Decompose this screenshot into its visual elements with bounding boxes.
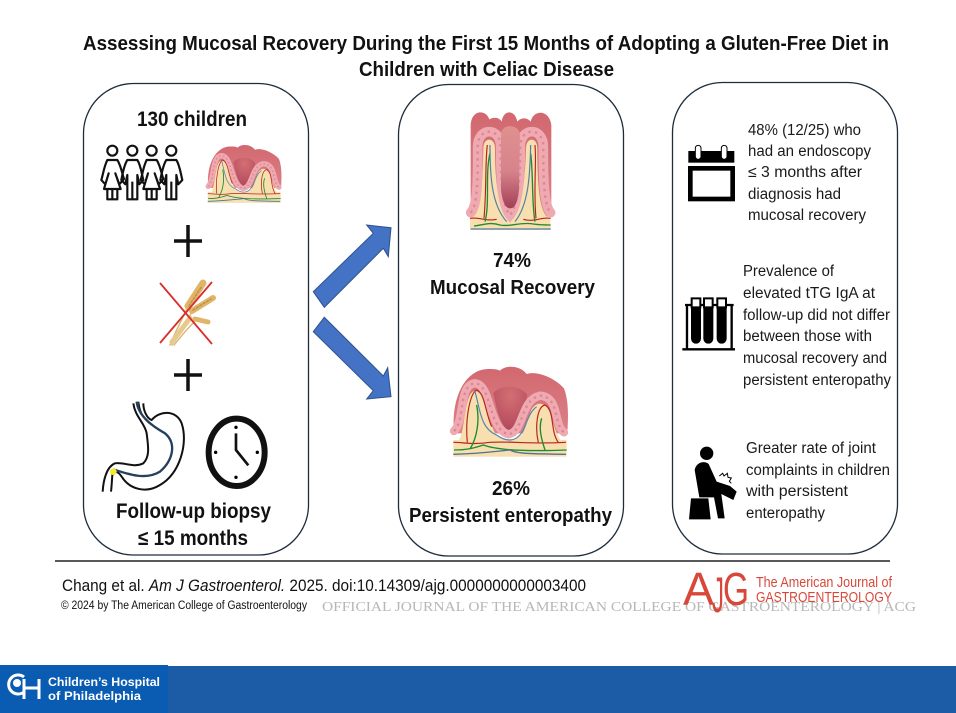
title: Children with Celiac Disease xyxy=(359,59,614,81)
plus sign xyxy=(174,359,202,391)
icon: crossed wheat xyxy=(160,282,213,345)
panel: additional findings xyxy=(672,82,898,554)
icon: test tubes xyxy=(682,298,735,349)
text: joint complaints finding: with persistent xyxy=(745,483,849,500)
plus sign xyxy=(174,225,202,257)
stat: 74% mucosal recovery xyxy=(430,250,596,299)
citation: Chang et al. Am J Gastroenterol. 2025. doi:10.14309/ajg.0000000000003400 xyxy=(62,576,586,595)
logo: AJG xyxy=(683,563,893,623)
text: joint complaints finding: enteropathy xyxy=(746,505,825,522)
text: joint complaints finding: Greater rate of joint xyxy=(746,440,877,457)
panel: study population xyxy=(84,84,308,555)
copyright: © 2024 by The American College of Gastroenterology xyxy=(61,600,307,612)
text: tTG IgA finding: elevated tTG IgA at xyxy=(743,285,876,302)
caption: follow-up biopsy: ≤ 15 months xyxy=(138,527,248,550)
text: joint complaints finding xyxy=(745,440,890,522)
logo: AJG: A xyxy=(683,563,714,615)
logo: AJG: G xyxy=(723,563,749,615)
journal line: OFFICIAL JOURNAL OF THE AMERICAN COLLEGE OF GASTROENTEROLOGY | ACG xyxy=(322,599,916,614)
stat: 74% mucosal recovery: 74% xyxy=(493,250,531,272)
heading: 130 children: 130 children xyxy=(137,108,247,131)
icon: stomach with endoscope xyxy=(103,402,184,492)
arrow: down to persistent enteropathy xyxy=(313,317,391,399)
text: tTG IgA finding: persistent enteropathy xyxy=(743,372,891,389)
text: endoscopy finding xyxy=(748,122,871,224)
stat: 74% mucosal recovery: Mucosal Recovery xyxy=(430,277,596,299)
arrow: up to mucosal recovery xyxy=(313,225,391,307)
caption: follow-up biopsy: Follow-up biopsy xyxy=(116,500,271,523)
text: tTG IgA finding xyxy=(743,263,891,389)
logo: AJG: The American Journal of xyxy=(756,575,893,591)
icon: children xyxy=(101,146,182,199)
logo: AJG: J xyxy=(712,567,724,623)
text: endoscopy finding: mucosal recovery xyxy=(748,207,866,224)
footer band xyxy=(0,666,956,713)
stat: 26% persistent enteropathy: Persistent enteropathy xyxy=(409,505,613,527)
text: endoscopy finding: 48% (12/25) who xyxy=(748,122,861,139)
logo: Children's Hospital of Philadelphia: Children’s Hospital xyxy=(48,677,160,689)
logo: AJG: GASTROENTEROLOGY xyxy=(756,590,892,606)
icon: flat villi small xyxy=(208,145,281,203)
illustration: recovered villi xyxy=(470,112,551,230)
title: Assessing Mucosal Recovery During the First 15 Months of Adopting a Gluten-Free Diet in xyxy=(83,33,889,55)
text: tTG IgA finding: between those with xyxy=(743,328,872,345)
text: joint complaints finding: complaints in children xyxy=(746,462,890,479)
panel: outcomes xyxy=(398,84,624,556)
stat: 26% persistent enteropathy: 26% xyxy=(492,478,530,500)
logo: Children's Hospital of Philadelphia: of Philadelphia xyxy=(48,691,142,703)
text: tTG IgA finding: Prevalence of xyxy=(743,263,835,280)
icon: clock xyxy=(209,419,265,486)
illustration: flat villi xyxy=(453,367,568,457)
icon: seated child with sore knee xyxy=(689,447,737,519)
stat: 26% persistent enteropathy xyxy=(409,478,613,527)
text: tTG IgA finding: follow-up did not differ xyxy=(743,307,890,324)
icon: calendar xyxy=(688,145,734,199)
text: endoscopy finding: ≤ 3 months after xyxy=(748,164,862,181)
text: endoscopy finding: diagnosis had xyxy=(748,186,841,203)
text: endoscopy finding: had an endoscopy xyxy=(748,143,871,160)
logo: Children's Hospital of Philadelphia xyxy=(0,665,168,713)
caption: follow-up biopsy xyxy=(116,500,271,550)
text: tTG IgA finding: mucosal recovery and xyxy=(743,350,887,367)
title xyxy=(83,33,889,81)
